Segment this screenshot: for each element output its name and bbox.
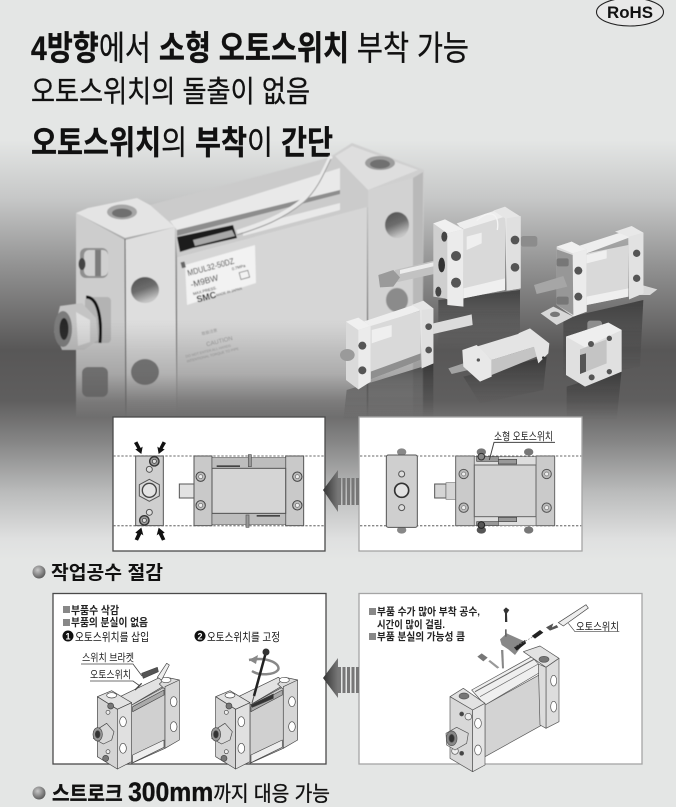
top fitting bbox=[80, 248, 108, 278]
caution label: 取扱注意 bbox=[201, 326, 218, 336]
cylinder E end-on bbox=[566, 321, 622, 387]
heading: labor reduction: 작업공수 절감 bbox=[51, 562, 163, 584]
rod nut bbox=[85, 297, 111, 343]
problem list: 시간이 많이 걸림. bbox=[377, 618, 445, 631]
nameplate: MADE IN JAPAN bbox=[216, 286, 243, 297]
step 1 label: 오토스위치를 삽입 bbox=[75, 631, 149, 644]
feature list: 부품수 삭감 bbox=[71, 604, 119, 617]
wire bbox=[237, 156, 331, 232]
front view bbox=[136, 456, 163, 526]
arrow: top panels bbox=[323, 470, 359, 512]
cylinder B with feet bbox=[534, 226, 657, 325]
caution label bbox=[186, 328, 238, 362]
small cylinders photo bbox=[340, 207, 657, 420]
panel: before, exploded view bbox=[359, 594, 642, 772]
icon: screwdriver with rotation arrow bbox=[249, 648, 278, 703]
front view bbox=[397, 448, 406, 456]
callout: bracket and switch: 오토스위치 bbox=[90, 668, 131, 681]
step 1 label bbox=[62, 630, 149, 644]
port holes bbox=[131, 277, 159, 303]
cylinder step 2 bbox=[211, 677, 298, 769]
main cylinder photo bbox=[54, 143, 424, 420]
body bbox=[177, 207, 367, 420]
reflections bbox=[438, 290, 520, 347]
heading: stroke up to 300mm: 스트로크 300mm까지 대응 가능 bbox=[52, 777, 330, 807]
nameplate: SMC bbox=[195, 289, 218, 304]
caution label: INTENTIONAL TORQUE TO PIPE bbox=[186, 347, 240, 364]
RoHS badge: RoHS bbox=[607, 3, 653, 22]
title: 오토스위치의 부착이 간단 bbox=[31, 124, 333, 161]
step 2 label: 2 bbox=[197, 632, 203, 642]
step 2 label bbox=[194, 630, 280, 644]
feature list: 부품의 분실이 없음 bbox=[71, 616, 148, 629]
side view bbox=[435, 484, 446, 498]
label: auto switch: 오토스위치 bbox=[576, 620, 619, 633]
title: 오토스위치의 돌출이 없음 bbox=[31, 76, 310, 109]
feature list bbox=[63, 604, 148, 629]
panel: after, mounting steps bbox=[53, 594, 326, 769]
callout: bracket and switch bbox=[81, 651, 142, 686]
step 2 label: 오토스위치를 고정 bbox=[207, 631, 280, 644]
panel: before, front and side view bbox=[359, 417, 582, 551]
nameplate: MAX.PRESS. bbox=[192, 285, 217, 296]
problem list: 부품 수가 많아 부착 공수, bbox=[377, 605, 480, 618]
label: small auto switch: 소형 오토스위치 bbox=[494, 430, 553, 443]
arrow: bottom panels bbox=[323, 658, 359, 698]
title bbox=[31, 30, 469, 161]
callout: bracket and switch: 스위치 브라켓 bbox=[82, 651, 134, 664]
four arrows bbox=[134, 441, 166, 541]
panel: after, front and side view bbox=[113, 417, 325, 551]
problem list bbox=[369, 605, 480, 643]
cylinder C with rod right bbox=[340, 301, 473, 389]
nameplate: -M9BW bbox=[189, 272, 219, 289]
rear end plate bbox=[332, 143, 424, 263]
switch parts bbox=[477, 605, 619, 669]
exploded cylinder bbox=[446, 646, 559, 772]
nameplate: 0.7MPa bbox=[231, 263, 247, 271]
lower fitting bbox=[82, 367, 108, 397]
cylinder A with long rod bbox=[378, 207, 537, 307]
auto switch bbox=[177, 225, 237, 252]
front plate bbox=[76, 213, 126, 420]
nameplate: MDUL32-50DZ bbox=[186, 256, 235, 278]
body rails bbox=[150, 156, 368, 257]
photo backdrop gradient bbox=[0, 140, 676, 560]
caution label: DO NOT ENTER ALL HANDS bbox=[185, 343, 232, 359]
cylinder step 1 bbox=[93, 663, 179, 769]
cylinder D small bbox=[448, 328, 549, 382]
side view bbox=[179, 484, 194, 498]
problem list: 부품 분실의 가능성 큼 bbox=[377, 630, 465, 643]
step 1 label: 1 bbox=[65, 632, 71, 642]
RoHS badge bbox=[596, 0, 664, 26]
title: 4방향에서 소형 오토스위치 부착 가능 bbox=[31, 30, 469, 68]
nameplate bbox=[181, 245, 256, 306]
caution label: CAUTION bbox=[206, 336, 233, 348]
